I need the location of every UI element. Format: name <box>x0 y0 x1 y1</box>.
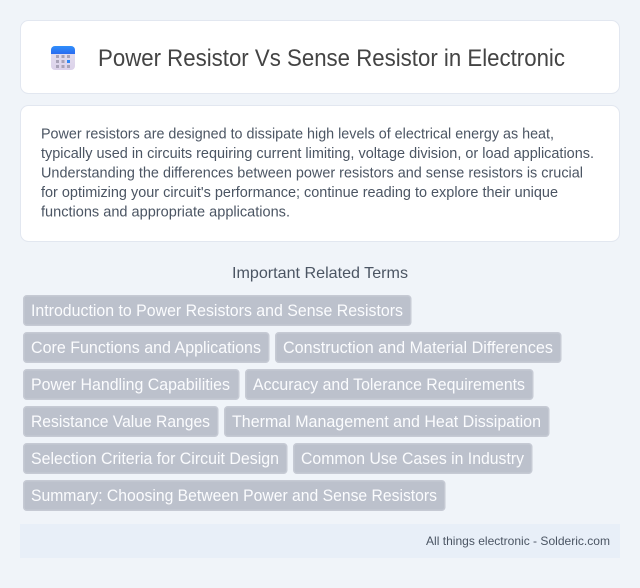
tag: accuracy: Accuracy and Tolerance Requirements <box>253 376 525 394</box>
text block: description: Power resistors are designed to dissipate high levels of electrical energy as heat, <box>41 126 554 142</box>
tag: core functions <box>24 333 269 362</box>
tag: power handling: Power Handling Capabilities <box>31 376 230 394</box>
text block: description <box>41 126 594 220</box>
tag: resistance value <box>24 407 218 436</box>
panel: title card <box>20 20 620 94</box>
title: Power Resistor Vs Sense Resistor in Electronic <box>98 45 565 72</box>
tag: construction <box>276 333 561 362</box>
tag: selection criteria <box>24 444 287 473</box>
tag: construction: Construction and Material Differences <box>283 339 553 357</box>
tag: common use cases: Common Use Cases in Industry <box>301 450 525 468</box>
tag: thermal management <box>225 407 549 436</box>
tag: summary: Summary: Choosing Between Power and Sense Resistors <box>31 487 437 505</box>
footer: All things electronic - Solderic.com <box>426 534 610 548</box>
text block: description: for optimizing your circuit's performance; continue reading to explore their unique <box>41 185 558 201</box>
tag: accuracy <box>246 370 533 399</box>
tag: common use cases <box>294 444 532 473</box>
footer <box>20 524 620 558</box>
icon: calendar grid <box>51 46 75 70</box>
tag: introduction <box>24 296 411 325</box>
text block: description: Understanding the differences between power resistors and sense resistors is crucial <box>41 166 583 182</box>
tag: thermal management: Thermal Management and Heat Dissipation <box>232 413 541 431</box>
tag: summary <box>24 481 445 510</box>
tag: introduction: Introduction to Power Resistors and Sense Resistors <box>31 302 403 320</box>
text block: description: typically used in circuits requiring current limiting, voltage division, or load applications. <box>41 146 594 162</box>
tag: power handling <box>24 370 239 399</box>
text block: description: functions and appropriate applications. <box>41 204 290 220</box>
tag: core functions: Core Functions and Applications <box>31 339 261 357</box>
heading: related terms: Important Related Terms <box>232 265 408 282</box>
panel: description <box>20 106 620 242</box>
tag: resistance value: Resistance Value Ranges <box>31 413 210 431</box>
tag: selection criteria: Selection Criteria for Circuit Design <box>31 450 279 468</box>
